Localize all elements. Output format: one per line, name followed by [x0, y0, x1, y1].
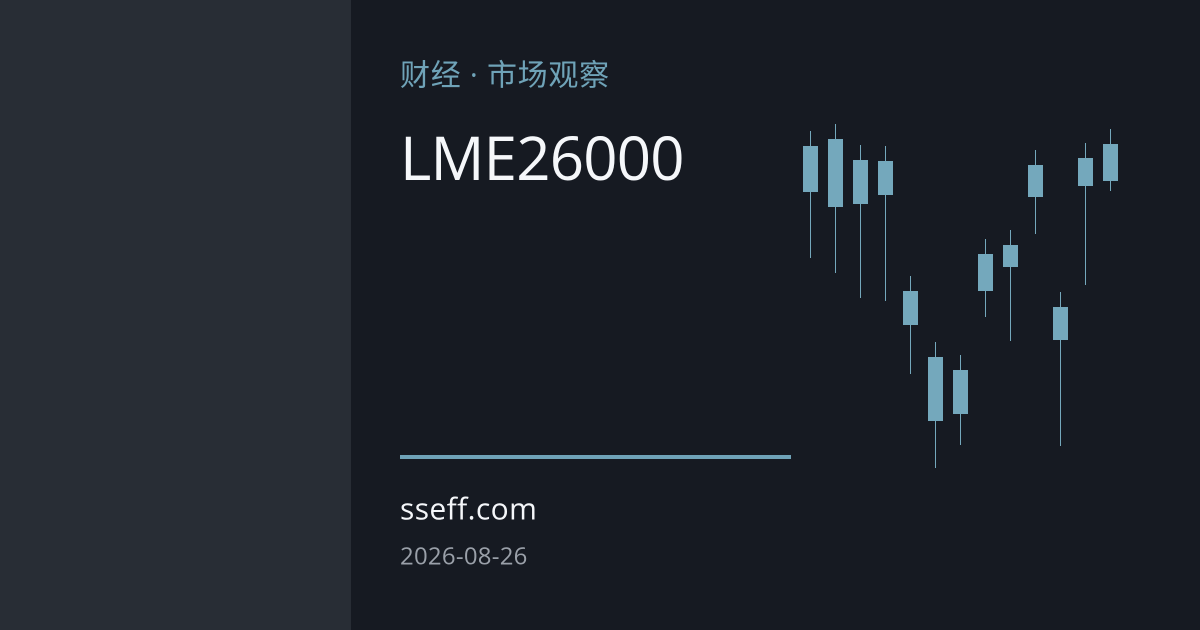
candlestick chart	[803, 124, 1118, 468]
left panel	[0, 0, 351, 630]
date: 2026-08-26	[400, 540, 528, 572]
site name: sseff.com	[400, 488, 537, 528]
title: LME26000	[400, 116, 684, 198]
category heading: 财经 · 市场观察	[400, 54, 610, 94]
accent divider	[400, 455, 791, 459]
